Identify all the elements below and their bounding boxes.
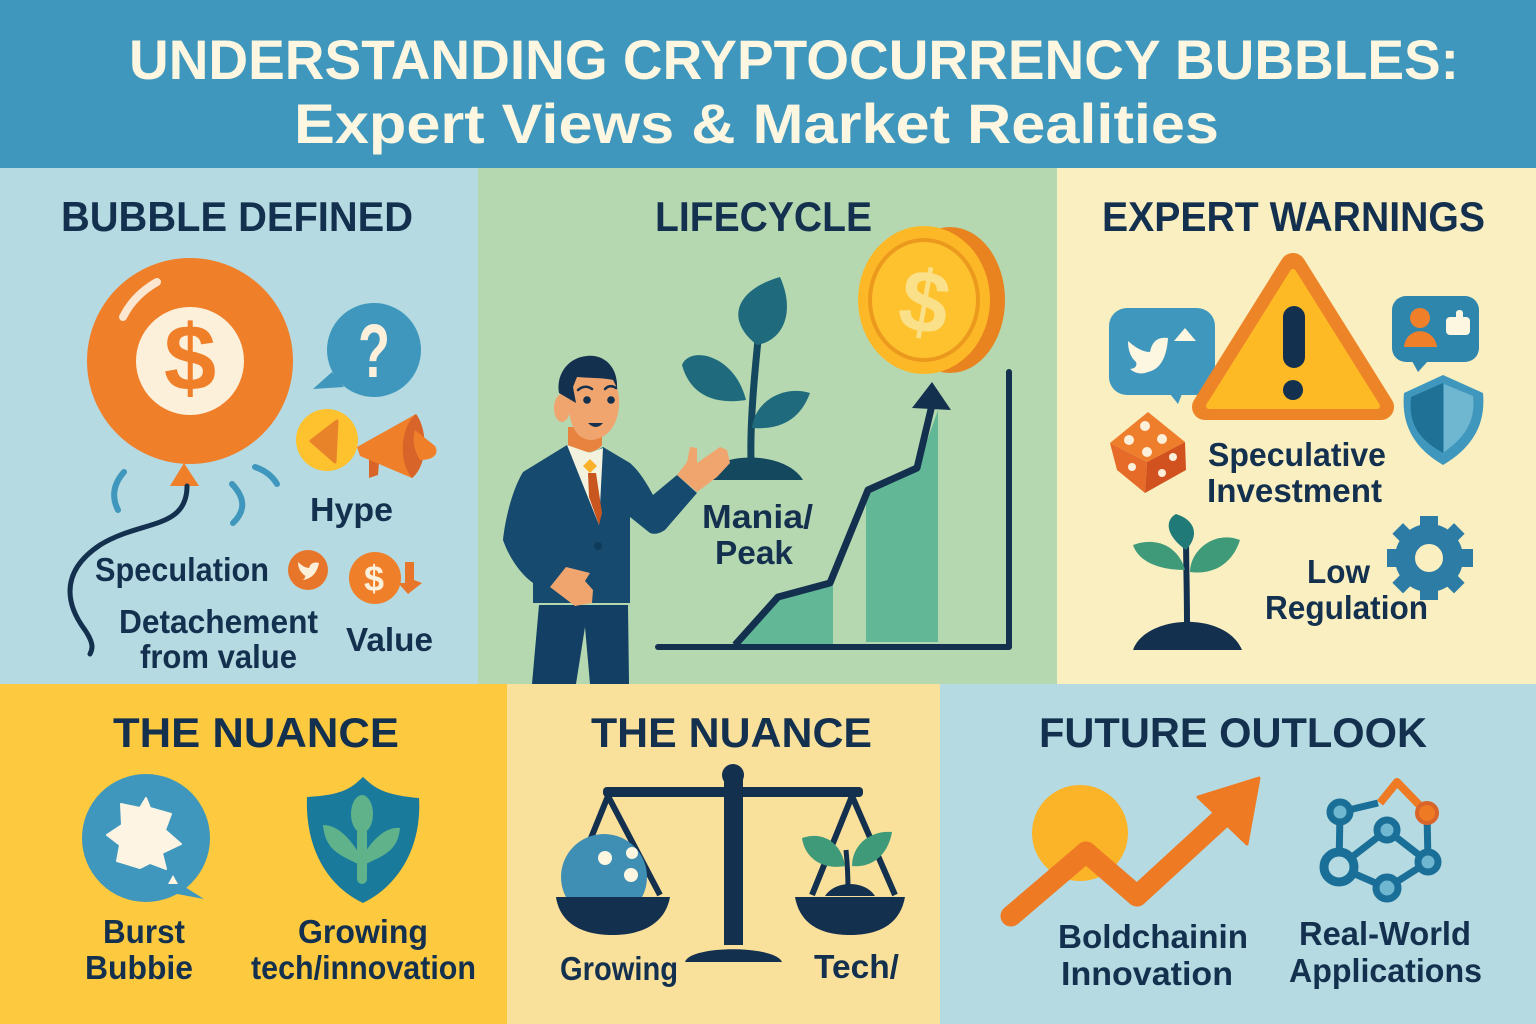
label: detachement from value: [119, 603, 318, 675]
icon: warning triangle: [1205, 266, 1381, 407]
label: low regulation: Regulation: [1265, 589, 1428, 626]
icon: gear: [1387, 516, 1473, 600]
heading: future outlook: FUTURE OUTLOOK: [1039, 709, 1427, 756]
icon: balance scale: [556, 764, 905, 962]
label: detachement from value: from value: [140, 638, 297, 675]
heading: the nuance: THE NUANCE: [113, 709, 399, 756]
icon: gold coin: [858, 226, 1005, 374]
icon: dice: [1110, 412, 1186, 493]
heading: the nuance: THE NUANCE: [591, 709, 872, 756]
heading: lifecycle: LIFECYCLE: [655, 193, 872, 240]
label: burst bubble: [85, 913, 193, 986]
icon: value down coin: $: [364, 558, 384, 599]
panel: future outlook: [940, 684, 1536, 1024]
label: hype: Hype: [310, 491, 393, 528]
figure: businessman: [503, 356, 730, 684]
icon: growth arrow: [1011, 818, 1222, 916]
icon: people speech bubble: [1392, 296, 1479, 372]
label: growing tech innovation: [251, 913, 476, 986]
icon: twitter speech bubble: [1109, 308, 1215, 404]
title: Expert Views & Market Realities: [294, 92, 1219, 155]
icon: sun: [1032, 785, 1128, 881]
icon: shield: [1404, 375, 1483, 465]
panel: expert warnings: [1057, 168, 1536, 684]
icon: orange balloon with dollar: [70, 258, 293, 654]
icon: small bird badge: [288, 550, 328, 590]
panel: bubble defined: [0, 168, 478, 684]
icon: arrow head: [1198, 778, 1259, 844]
panel: the nuance center: [507, 684, 940, 1024]
heading: expert warnings: EXPERT WARNINGS: [1102, 193, 1485, 240]
icon: megaphone: [296, 409, 437, 478]
panel: the nuance left: [0, 684, 507, 1024]
label: boldchainin innovation: Innovation: [1061, 955, 1233, 992]
label: growing: Growing: [560, 950, 678, 987]
label: boldchainin innovation: [1058, 918, 1248, 992]
label: speculative investment: Speculative: [1208, 436, 1386, 473]
label: burst bubble: Bubbie: [85, 949, 193, 986]
label: detachement from value: Detachement: [119, 603, 318, 640]
chart: rising line with axes: [658, 372, 1009, 647]
label: value: Value: [346, 621, 433, 658]
label: speculative investment: [1207, 436, 1386, 509]
title: [129, 28, 1459, 155]
label: real-world applications: Applications: [1289, 952, 1482, 989]
label: real-world applications: Real-World: [1299, 915, 1471, 952]
label: burst bubble: Burst: [103, 913, 185, 950]
heading: bubble defined: BUBBLE DEFINED: [61, 193, 413, 240]
label: growing tech innovation: Growing: [298, 913, 428, 950]
title: UNDERSTANDING CRYPTOCURRENCY BUBBLES:: [129, 28, 1459, 91]
icon: orange balloon with dollar: $: [164, 305, 216, 410]
header banner: [0, 0, 1536, 168]
label: real-world applications: [1289, 915, 1482, 989]
icon: blockchain network: [1324, 782, 1438, 899]
label: mania peak: Mania/: [702, 498, 813, 535]
label: low regulation: Low: [1307, 553, 1370, 590]
panel: lifecycle: [478, 168, 1057, 684]
icon: green plant shield: [307, 777, 419, 903]
label: mania peak: Peak: [715, 534, 794, 571]
label: speculation: Speculation: [95, 551, 269, 588]
icon: plant: [1133, 514, 1242, 650]
label: speculative investment: Investment: [1207, 472, 1382, 509]
icon: value down coin: [349, 552, 422, 604]
label: boldchainin innovation: Boldchainin: [1058, 918, 1248, 955]
icon: burst bubble: [82, 774, 210, 902]
label: tech: Tech/: [814, 948, 899, 985]
label: low regulation: [1265, 553, 1428, 626]
label: growing tech innovation: tech/innovation: [251, 949, 476, 986]
label: mania peak: [702, 498, 813, 571]
icon: question speech bubble: ?: [358, 309, 390, 394]
icon: gold coin: $: [892, 249, 957, 355]
icon: sprout: [682, 277, 810, 480]
icon: question speech bubble: [313, 303, 421, 397]
